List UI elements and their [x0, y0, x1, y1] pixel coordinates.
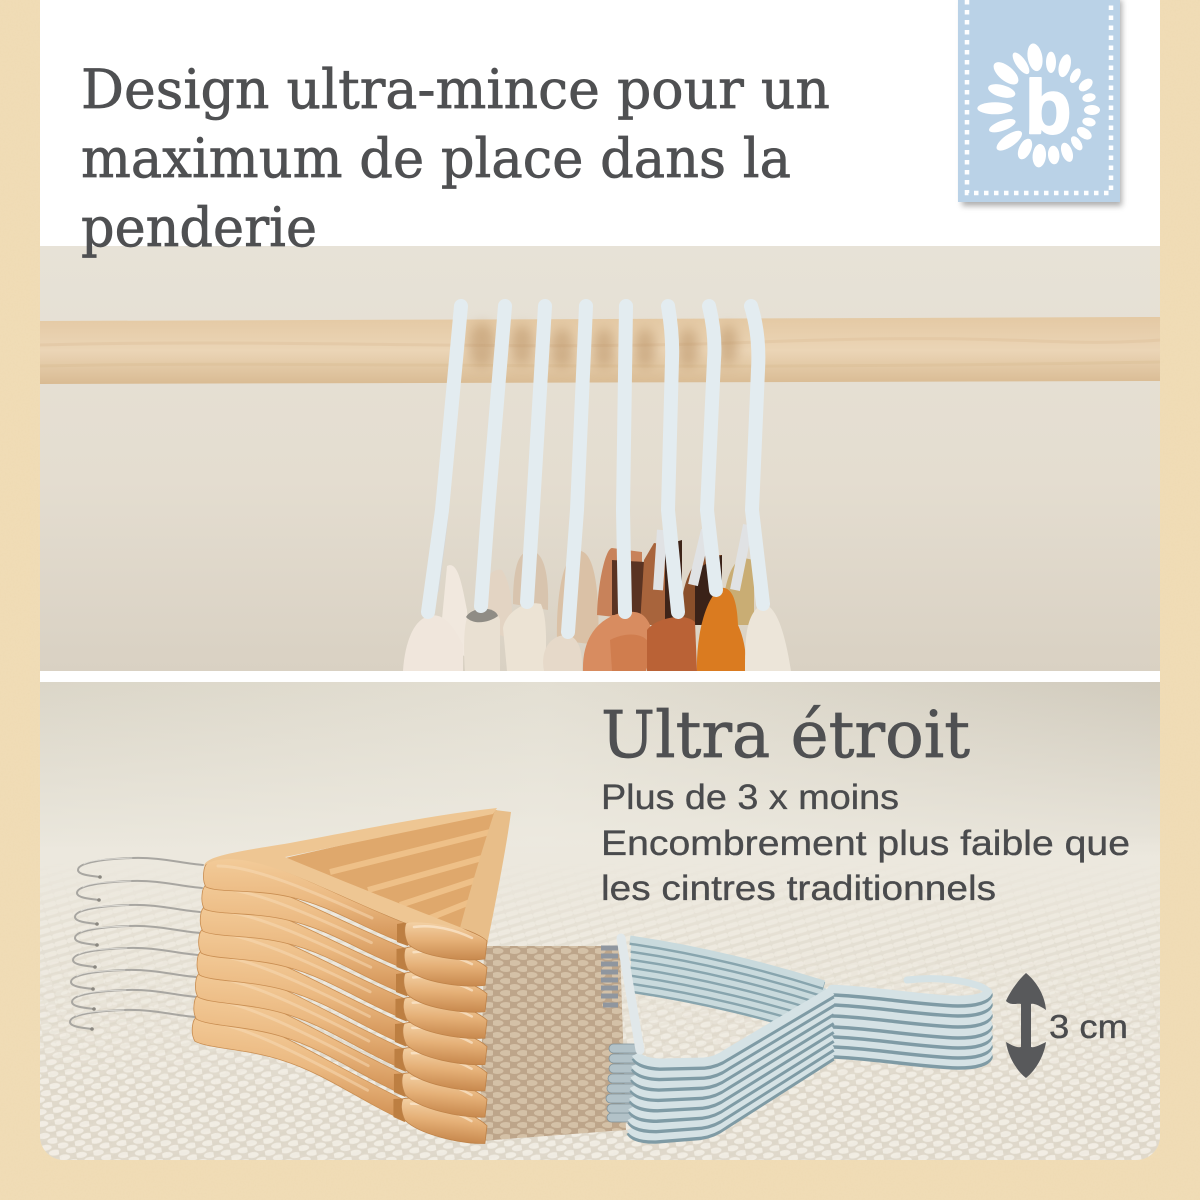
tag body [958, 0, 1120, 202]
photo: wooden vs slim hanger stacks [40, 682, 1160, 1160]
description text: Plus de 3 x moins [601, 778, 899, 817]
stacked layers [192, 857, 487, 1145]
eight slim hangers [428, 306, 763, 632]
side arm with hook [832, 979, 988, 1065]
title: penderie [81, 196, 317, 259]
shaded carpet between stacks [480, 946, 626, 1141]
stitching [967, 0, 1111, 193]
top face [204, 808, 497, 941]
slim hanger stack [601, 938, 988, 1140]
left vertical bar [621, 938, 640, 1050]
wooden rail [40, 317, 1160, 384]
description text [601, 778, 1130, 908]
logo tag [958, 0, 1122, 206]
height arrow [1006, 973, 1046, 1078]
label: 3 cm: 3 cm [1049, 1008, 1128, 1045]
title [81, 58, 830, 259]
white header band [40, 0, 1160, 247]
front small hooks [606, 1044, 641, 1122]
photo: narrow hangers on wooden rail [40, 246, 1160, 671]
white divider [40, 671, 1160, 682]
front arm stack [631, 991, 832, 1140]
carpet [40, 835, 1160, 1160]
far arm [460, 810, 511, 945]
back arm stack [630, 939, 825, 1034]
description text: les cintres traditionnels [601, 869, 996, 908]
tag shadow [962, 0, 1122, 206]
subheading: Ultra étroit: Ultra étroit [601, 698, 970, 773]
folded clothes [403, 540, 791, 671]
description text: Encombrement plus faible que [601, 824, 1130, 863]
inner triangle of wooden hangers [285, 810, 497, 930]
logo flower [977, 42, 1100, 168]
metal hooks [70, 858, 203, 1031]
logo letter b: b [1025, 65, 1071, 150]
rear small hooks [601, 948, 618, 1005]
hanger shadows on rail [468, 323, 738, 368]
wooden hanger stack [70, 808, 511, 1145]
title: Design ultra-mince pour un [81, 58, 830, 121]
title: maximum de place dans la [81, 127, 791, 190]
